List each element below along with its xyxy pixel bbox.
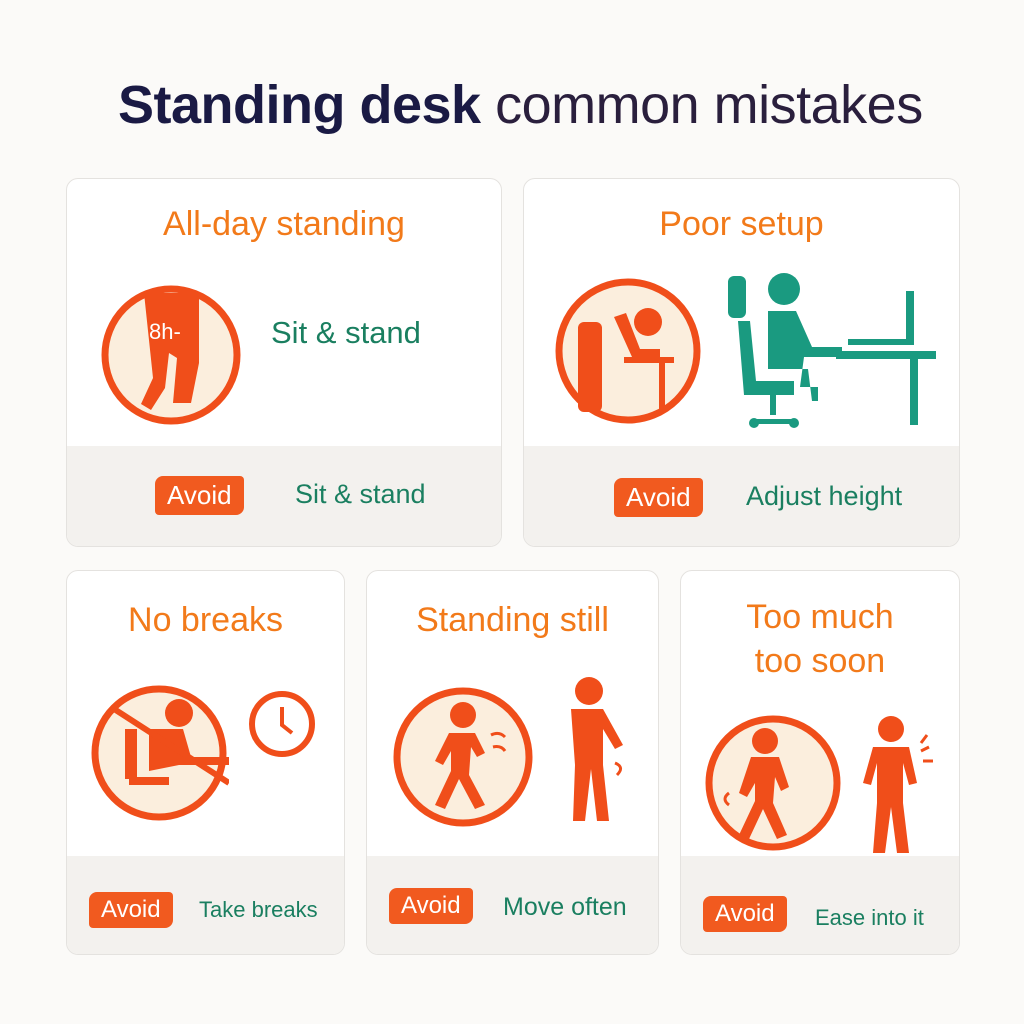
avoid tag: Avoid <box>715 900 775 927</box>
avoid tag <box>389 888 473 924</box>
avoid tag <box>703 896 787 932</box>
icon: walking in circle <box>394 688 532 826</box>
heading: Standing still <box>416 601 609 639</box>
avoid tag <box>614 478 703 517</box>
icon: standing person with pain <box>863 716 933 853</box>
heading <box>746 598 894 680</box>
heading: All-day standing <box>163 205 405 243</box>
panel: standing still <box>366 570 659 955</box>
avoid tag: Avoid <box>626 482 691 512</box>
title: Standing desk common mistakes <box>118 75 923 135</box>
advice: Ease into it <box>815 905 924 930</box>
panel: poor setup <box>523 178 960 547</box>
advice: Sit & stand <box>295 479 426 509</box>
advice: Move often <box>503 893 627 921</box>
panel: too much too soon <box>680 570 960 955</box>
icon: correct sitting <box>728 273 936 428</box>
panel: all-day standing <box>66 178 502 547</box>
advice: Take breaks <box>199 897 318 922</box>
text: sit & stand: Sit & stand <box>271 315 421 350</box>
heading: Poor setup <box>659 205 824 243</box>
icon: no break sitting <box>92 686 229 820</box>
icon: standing person <box>571 677 623 821</box>
icon: clock <box>249 691 315 757</box>
icon: legs 8h: 8h- <box>149 319 181 344</box>
avoid tag <box>89 892 173 928</box>
icon: legs 8h <box>102 286 240 424</box>
avoid tag: Avoid <box>401 892 461 919</box>
icon: strained person in circle <box>706 716 840 850</box>
advice: Adjust height <box>746 481 902 511</box>
avoid tag <box>155 476 244 515</box>
icon: slouched <box>556 278 700 424</box>
heading: No breaks <box>128 601 283 639</box>
avoid tag: Avoid <box>101 896 161 923</box>
heading: Too much <box>746 598 894 636</box>
avoid tag: Avoid <box>167 480 232 510</box>
panel: no breaks <box>66 570 345 955</box>
heading: too soon <box>755 642 885 680</box>
